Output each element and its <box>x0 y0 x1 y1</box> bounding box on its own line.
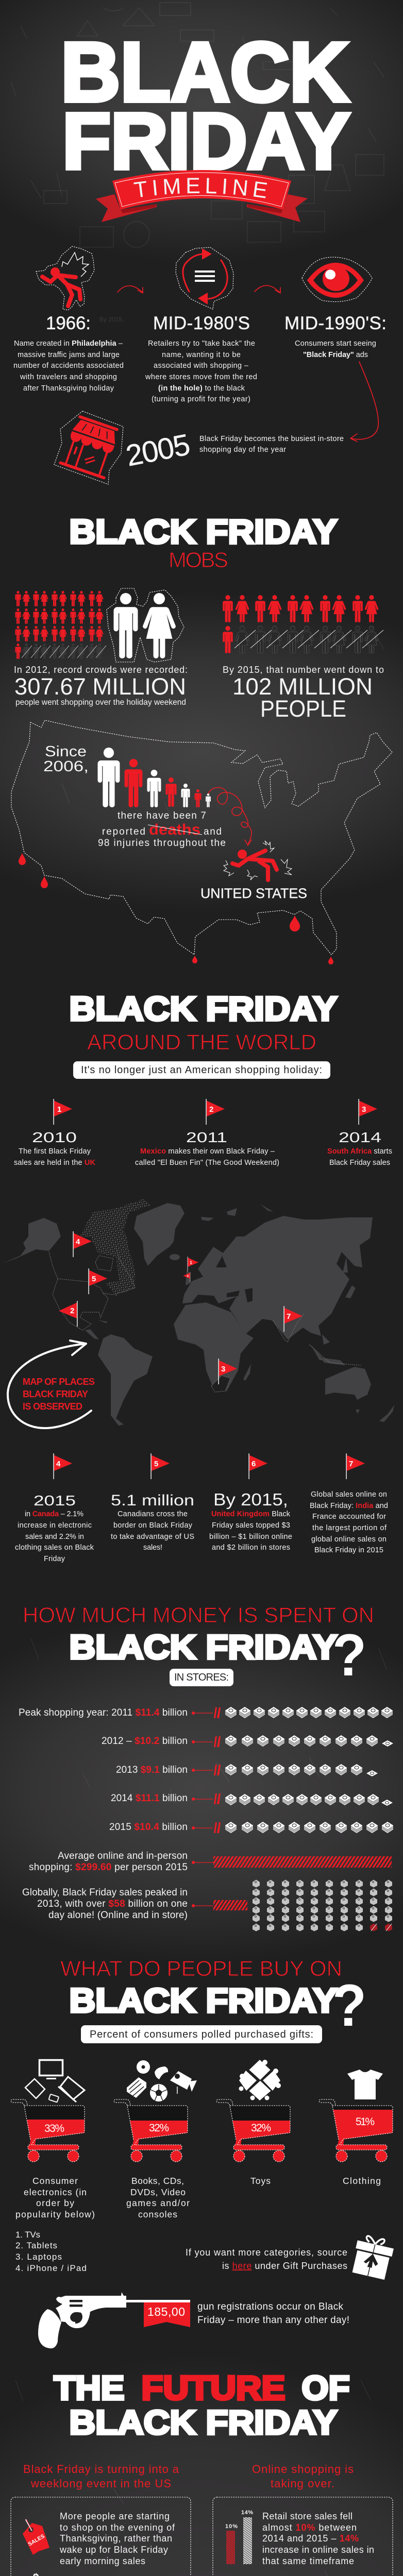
label: books: Books, CDs, <box>131 2176 184 2186</box>
text: evening shopping: wake up for Black Friday <box>59 2545 168 2555</box>
cart: 32% books: 32% <box>149 2122 169 2134</box>
text: 1966: with travelers and shopping <box>20 373 117 381</box>
callout: no longer just american: It's no longer just an American shopping holiday: <box>81 1064 322 1076</box>
map: world <box>3 1199 394 1426</box>
text: evening shopping: Thanksgiving, rather than <box>60 2533 172 2544</box>
heading: the future: OF <box>302 2369 349 2407</box>
heading: the future <box>54 2369 349 2441</box>
item: canada 2015 <box>15 1493 94 1563</box>
cart: 32% books <box>114 2099 188 2162</box>
row: 2013: 2013 $9.1 billion <box>116 1765 188 1775</box>
chart: 2015 crowds <box>223 595 383 653</box>
item: global online sales: Global sales online on <box>311 1490 387 1499</box>
stat: 2012 crowds: 307.67 MILLION <box>14 673 186 700</box>
item: 2011 mexico: called "El Buen Fin" (The Good Weekend) <box>135 1159 279 1167</box>
flags 4 to 7: 6 <box>251 1460 256 1468</box>
item: global online sales: Black Friday: India and <box>310 1502 388 1510</box>
heading: around the world <box>69 989 337 1054</box>
stray label: By 2015, <box>99 316 124 323</box>
subheading: online: Online shopping is <box>252 2463 354 2476</box>
item: 5.1 million: border on Black Friday <box>113 1521 193 1530</box>
chart: shrinking people <box>98 748 211 807</box>
stat: 2012 crowds <box>14 665 188 707</box>
text: 1966 <box>13 340 124 393</box>
icon: t-shirt <box>347 2070 383 2099</box>
item: 2011 mexico <box>135 1129 279 1167</box>
heading: around the world: BLACK FRIDAY <box>69 989 337 1027</box>
item: canada 2015: 2015 <box>33 1493 76 1509</box>
subheading: online <box>252 2463 354 2490</box>
item: 5.1 million: Canadians cross the <box>117 1510 188 1518</box>
flags 4 to 7 <box>53 1453 365 1479</box>
icon: eye <box>302 257 372 302</box>
row: 2011: Peak shopping year: 2011 $11.4 billion <box>19 1707 188 1718</box>
text: mid 1980s: where stores move from the red <box>145 373 257 381</box>
item: global online sales <box>310 1490 388 1554</box>
row: global sales: 2013, with over $58 billion on one <box>37 1899 188 1909</box>
cart: 32% toys <box>216 2099 290 2162</box>
icon: gift <box>350 2233 395 2280</box>
arrow: map callout <box>8 1341 91 1428</box>
ribbon: timeline <box>96 170 308 222</box>
list: electronics ranking: 3. Laptops <box>15 2252 62 2262</box>
subheading: weeklong: Black Friday is turning into a <box>23 2463 179 2476</box>
text: retail decline: that same timeframe <box>262 2556 354 2566</box>
chart: price tags <box>253 1879 392 1931</box>
stat: 2012 crowds: In 2012, record crowds were recorded: <box>14 665 188 675</box>
label: toys: Toys <box>250 2176 271 2186</box>
map flags: 1 <box>190 1260 192 1265</box>
icons: blood drops <box>19 853 333 964</box>
heading: how much money: ? <box>332 1622 366 1688</box>
text: retail decline: 2014 and 2015 – 14% <box>262 2533 359 2544</box>
cart: 33%: 33% <box>44 2123 64 2134</box>
text: 2005: shopping day of the year <box>199 446 286 454</box>
flag 2 <box>206 1099 225 1125</box>
label: electronics <box>15 2176 95 2219</box>
flag 1: 1 <box>57 1105 61 1114</box>
text: mid 1980s: Retailers try to "take back" the <box>148 340 255 348</box>
text: mid 1980s: name, wanting it to be <box>162 351 241 359</box>
text: retail decline: increase in online sales in <box>262 2545 374 2555</box>
heading: the future: FUTURE <box>141 2369 286 2407</box>
row: global sales: Globally, Black Friday sales peaked in <box>22 1887 188 1898</box>
text: evening shopping: to shop on the evening of <box>60 2522 175 2533</box>
icon: falling person <box>36 246 94 310</box>
item: uk 2015: United Kingdom Black <box>211 1510 291 1518</box>
heading: how much money: HOW MUCH MONEY IS SPENT ON <box>23 1603 374 1627</box>
map flags: 5 <box>92 1275 96 1283</box>
cart: 51% clothing: 51% <box>356 2116 375 2128</box>
flags 4 to 7: 7 <box>349 1460 353 1468</box>
title: FRIDAY <box>62 97 350 185</box>
chart: retail vs online bars: 14% <box>241 2510 253 2516</box>
heading: how much money <box>23 1603 374 1688</box>
heading: what do people buy: ? <box>332 1973 366 2039</box>
stat: 2012 crowds: people went shopping over the holiday weekend <box>15 698 186 707</box>
stat: 2015 crowds <box>223 665 384 722</box>
heading: what do people buy: WHAT DO PEOPLE BUY ON <box>60 1956 342 1980</box>
callout: no longer just american <box>73 1061 330 1079</box>
heading: 1966 <box>46 313 387 333</box>
list: electronics ranking <box>15 2230 87 2273</box>
text: mid 1990s: Consumers start seeing <box>295 340 376 348</box>
item: 2014 south africa: South Africa starts <box>327 1147 392 1156</box>
item: 5.1 million: sales! <box>143 1544 162 1552</box>
item: canada 2015: in Canada – 2.1% <box>25 1510 83 1518</box>
label: books: consoles <box>138 2209 177 2219</box>
text: 1966: after Thanksgiving holiday <box>23 384 114 393</box>
heading: 1966: MID-1990'S: <box>284 313 387 333</box>
panel: weeklong event <box>11 2497 191 2576</box>
text: retail decline: Retail store sales fell <box>262 2511 352 2521</box>
flags 4 to 7: 4 <box>56 1460 61 1468</box>
chart: retail vs online bars <box>225 2510 253 2564</box>
text: gun registrations: Friday – more than any other day! <box>197 2315 349 2326</box>
text: mid 1980s: associated with shopping – <box>154 362 249 370</box>
item: uk 2015: Friday sales topped $3 <box>212 1521 290 1530</box>
stat: 2015 crowds: By 2015, that number went down to <box>223 665 384 675</box>
text: source note: is here under Gift Purchases <box>222 2261 347 2271</box>
item: global online sales: Black Friday in 2015 <box>314 1546 383 1554</box>
item: 2014 south africa <box>327 1129 392 1167</box>
icon: sales tag: SALES <box>27 2533 46 2548</box>
text: mid 1980s: (turning a profit for the year) <box>152 395 250 403</box>
row: average spend: shopping: $299.60 per person 2015 <box>29 1862 188 1873</box>
flag 3: 3 <box>362 1105 366 1114</box>
heading: the future: BLACK FRIDAY <box>69 2403 337 2441</box>
item: canada 2015: sales and 2.2% in <box>25 1533 84 1541</box>
arrow 2 <box>255 285 280 293</box>
arrow 1 <box>117 286 143 293</box>
row: 2014: 2014 $11.1 billion <box>111 1793 188 1804</box>
arrow: looping <box>208 788 251 845</box>
callout: percent of consumers: Percent of consumers polled purchased gifts: <box>90 2029 313 2040</box>
heading: mobs: BLACK FRIDAY <box>69 512 337 550</box>
text: deaths and injuries: reported <box>102 826 145 837</box>
icon: media <box>127 2060 197 2102</box>
heading: what do people buy: BLACK FRIDAY <box>69 1981 337 2020</box>
item: global online sales: France accounted for <box>312 1513 386 1521</box>
cart: 33% <box>11 2099 85 2162</box>
heading: 1966: 1966: <box>46 313 91 333</box>
item: global online sales: the largest portion of <box>312 1524 387 1532</box>
row: 2014 <box>111 1793 393 1806</box>
text: gun registrations: gun registrations occur on Black <box>197 2301 343 2312</box>
row: global sales <box>22 1887 247 1921</box>
map flags: 3 <box>221 1365 225 1374</box>
icon: sales tag <box>23 2519 49 2555</box>
item: 2010 uk <box>14 1129 96 1167</box>
item: uk 2015 <box>209 1490 292 1552</box>
item: global online sales: global online sales on <box>311 1535 387 1544</box>
chart: retail vs online bars: 10% <box>225 2523 238 2530</box>
text: map of places: BLACK FRIDAY <box>23 1389 88 1399</box>
heading: the future: THE <box>54 2369 125 2407</box>
list: electronics ranking: 2. Tablets <box>15 2241 57 2250</box>
text: map of places <box>23 1377 95 1412</box>
item: canada 2015: increase in electronic <box>18 1521 92 1530</box>
item: 2010 uk: sales are held in the UK <box>14 1159 96 1167</box>
row: 2011 <box>19 1707 393 1718</box>
map flags <box>59 1231 303 1384</box>
text: deaths and injuries: 98 injuries throughout the <box>98 838 226 849</box>
label: clothing: Clothing <box>343 2176 381 2186</box>
text: 2005 <box>199 435 344 454</box>
text: deaths and injuries: and <box>204 826 222 837</box>
flag 3 <box>358 1099 377 1125</box>
label: electronics: Consumer <box>32 2176 78 2186</box>
panel: online <box>213 2497 393 2576</box>
row: 2013 <box>116 1764 378 1776</box>
text: evening shopping <box>59 2511 175 2566</box>
icon: fallen person <box>224 841 292 880</box>
heading: how much money: BLACK FRIDAY <box>69 1628 337 1666</box>
map flags: 2 <box>70 1307 74 1315</box>
row: average spend <box>29 1851 392 1873</box>
ribbon: timeline: TIMELINE <box>133 178 267 198</box>
label: books: DVDs, Video <box>130 2187 186 2197</box>
cart: 51% clothing <box>319 2099 393 2162</box>
chart: 2012 crowds <box>15 591 106 659</box>
title <box>61 25 350 185</box>
icon: cycle arrows <box>176 247 233 309</box>
text: deaths and injuries <box>98 810 226 849</box>
text: retail decline <box>262 2511 374 2566</box>
label: electronics: order by <box>36 2198 74 2208</box>
callout: in stores <box>170 1669 233 1686</box>
text: map of places: MAP OF PLACES <box>23 1377 95 1387</box>
item: 2010 uk: 2010 <box>32 1129 77 1145</box>
text: deaths and injuries: there have been 7 <box>117 810 206 821</box>
text: 2005: Black Friday becomes the busiest in-store <box>199 435 344 443</box>
heading: mobs <box>69 512 337 572</box>
icon: puzzle <box>239 2060 281 2100</box>
text: since 2006 <box>43 743 89 775</box>
list: electronics ranking: 4. iPhone / iPad <box>15 2263 87 2273</box>
banner: 185,00: 185,00 <box>147 2305 185 2318</box>
text: gun registrations <box>197 2301 349 2326</box>
item: 5.1 million <box>111 1492 194 1552</box>
year 2005: 2005 <box>123 428 193 473</box>
icon: electronics <box>25 2060 85 2102</box>
text: source note <box>186 2247 347 2271</box>
text: mid 1980s: (in the hole) to the black <box>158 384 245 393</box>
flag 2: 2 <box>209 1105 213 1114</box>
flag 1 <box>53 1099 72 1125</box>
item: 5.1 million: 5.1 million <box>111 1492 194 1509</box>
item: uk 2015: By 2015, <box>213 1490 288 1509</box>
item: canada 2015: Friday <box>44 1555 65 1563</box>
map flags: 7 <box>287 1312 291 1321</box>
flags 4 to 7: 5 <box>154 1460 158 1468</box>
heading: around the world: AROUND THE WORLD <box>87 1030 316 1054</box>
label: united states: UNITED STATES <box>200 886 307 901</box>
row: average spend: Average online and in-person <box>58 1851 188 1861</box>
list: electronics ranking: 1. TVs <box>15 2230 40 2240</box>
subheading: online: taking over. <box>271 2477 334 2490</box>
subheading: weeklong: weeklong event in the US <box>30 2477 171 2490</box>
icon: couple <box>107 588 184 662</box>
banner: 185,00 <box>144 2302 190 2327</box>
item: canada 2015: clothing sales on Black <box>15 1544 94 1552</box>
callout: percent of consumers <box>81 2025 322 2043</box>
item: 2014 south africa: 2014 <box>339 1129 381 1145</box>
icon: gun <box>38 2292 190 2348</box>
item: 2011 mexico: Mexico makes their own Black Friday – <box>140 1147 275 1156</box>
text: since 2006: Since <box>45 743 87 760</box>
text: mid 1980s <box>145 340 257 403</box>
heading: mobs: MOBS <box>169 548 228 572</box>
text: evening shopping: early morning sales <box>60 2556 145 2566</box>
item: 5.1 million: to take advantage of US <box>111 1533 194 1541</box>
text: 1966: Name created in Philadelphia – <box>14 340 123 348</box>
label: electronics: electronics (in <box>24 2187 87 2197</box>
item: 2014 south africa: Black Friday sales <box>329 1159 390 1167</box>
map flags: 4 <box>76 1238 80 1246</box>
text: 1966: number of accidents associated <box>13 362 124 370</box>
icon: store <box>54 411 123 484</box>
map flags: 6 <box>187 1275 189 1278</box>
text: retail decline: almost 10% between <box>262 2522 357 2533</box>
text: deaths and injuries: deaths <box>149 821 200 838</box>
label: books <box>126 2176 190 2219</box>
text: mid 1990s <box>295 340 376 359</box>
item: uk 2015: and $2 billion in stores <box>212 1544 290 1552</box>
stat: 2015 crowds: PEOPLE <box>260 696 346 722</box>
map: united states outline <box>11 720 392 955</box>
callout: in stores: IN STORES: <box>174 1672 229 1683</box>
row: 2012 <box>102 1735 393 1747</box>
cart: 32% toys: 32% <box>251 2122 271 2134</box>
label: electronics: popularity below) <box>15 2209 95 2219</box>
heading: 1966: MID-1980'S <box>153 313 250 333</box>
text: since 2006: 2006, <box>43 758 89 775</box>
row: global sales: day alone! (Online and in store) <box>48 1910 188 1921</box>
item: uk 2015: billion – $1 billion online <box>209 1533 292 1541</box>
heading: what do people buy <box>60 1956 366 2039</box>
text: 1966: massive traffic jams and large <box>18 351 120 359</box>
text: mid 1990s: "Black Friday" ads <box>303 351 368 359</box>
stat: 2015 crowds: 102 MILLION <box>232 673 373 700</box>
row: 2015 <box>109 1822 393 1833</box>
text: evening shopping: More people are starting <box>60 2511 170 2521</box>
title: BLACK <box>61 25 349 119</box>
text: source note: If you want more categories, source <box>186 2247 347 2258</box>
row: 2012: 2012 – $10.2 billion <box>102 1736 188 1747</box>
row: 2015: 2015 $10.4 billion <box>109 1822 188 1833</box>
text: map of places: IS OBSERVED <box>23 1401 82 1412</box>
arrow: 1990s to 2005 <box>350 362 378 442</box>
subheading: weeklong <box>23 2463 179 2490</box>
item: 2010 uk: The first Black Friday <box>19 1147 91 1156</box>
item: 2011 mexico: 2011 <box>186 1129 227 1145</box>
label: books: games and/or <box>126 2198 190 2208</box>
